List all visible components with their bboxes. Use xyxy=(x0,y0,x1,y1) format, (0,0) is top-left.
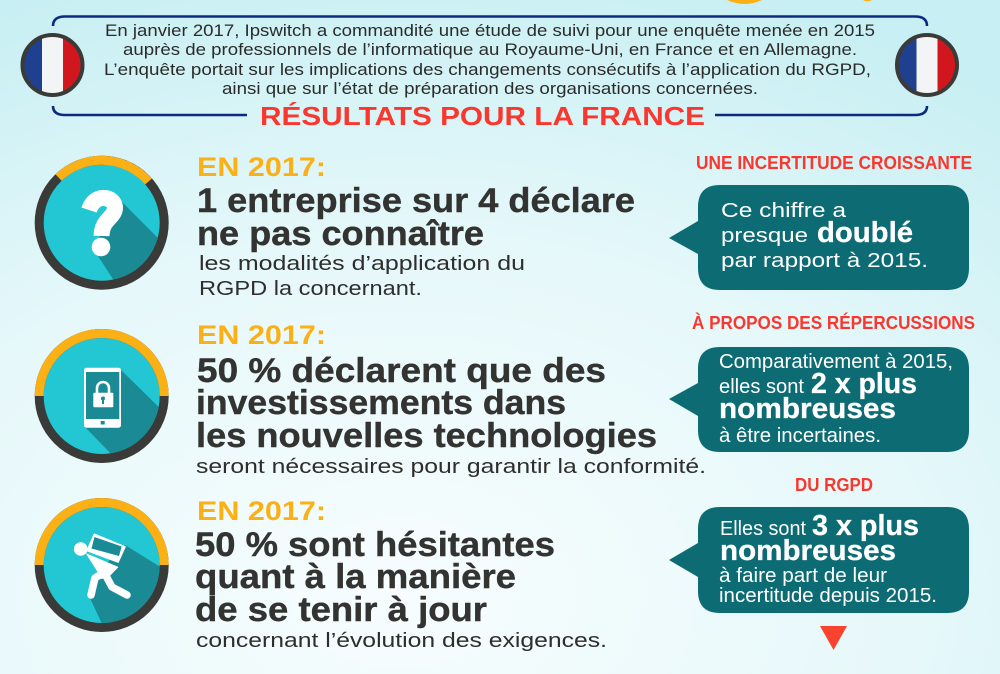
flag: France left xyxy=(22,35,83,95)
text block: year 3 xyxy=(195,496,607,652)
icon: question mark badge xyxy=(39,160,170,300)
callout: twice as many: 2 x plus xyxy=(811,368,917,400)
icon: person carrying laptop badge xyxy=(39,502,170,640)
label: of the GDPR: DU RGPD xyxy=(795,475,873,495)
arrow: continue down xyxy=(820,626,847,650)
flag: France right xyxy=(897,35,957,95)
callout: doubled: presque xyxy=(721,224,808,247)
callout: twice as many: Comparativement à 2015, xyxy=(719,350,953,373)
icon: phone with padlock badge xyxy=(39,334,170,470)
text block: year 2 xyxy=(196,320,706,478)
callout: three times as many: nombreuses xyxy=(720,535,896,567)
text block: year 2: les nouvelles technologies xyxy=(196,417,657,455)
callout: twice as many xyxy=(669,347,969,452)
intro text: ainsi que sur l’état de préparation des organisations concernées. xyxy=(222,80,758,98)
text block: year 3: 50 % sont hésitantes xyxy=(195,526,555,564)
callout: twice as many: nombreuses xyxy=(719,393,896,425)
text block: year 2: seront nécessaires pour garantir la conformité. xyxy=(196,456,706,478)
text block: year 1: ne pas connaître xyxy=(197,215,484,253)
intro frame xyxy=(53,16,927,115)
callout: doubled: par rapport à 2015. xyxy=(721,249,928,272)
heading: results for France: RÉSULTATS POUR LA FRANCE xyxy=(260,101,705,131)
callout: twice as many: elles sont xyxy=(719,375,804,398)
callout: three times as many: Elles sont xyxy=(720,517,806,540)
callout: three times as many: 3 x plus xyxy=(812,510,919,542)
text block: year 1 xyxy=(197,152,635,300)
text block: year 1: RGPD la concernant. xyxy=(199,278,422,300)
text block: year 3: quant à la manière xyxy=(195,558,516,596)
text block: year 3: EN 2017: xyxy=(197,496,326,526)
text block: year 3: de se tenir à jour xyxy=(195,591,487,629)
text block: year 2: EN 2017: xyxy=(197,320,326,350)
text block: year 1: EN 2017: xyxy=(197,152,326,182)
intro text: L’enquête portait sur les implications des changements consécutifs à l’application du RGPD, xyxy=(104,61,871,79)
callout: three times as many xyxy=(669,507,969,613)
label: about the repercussions: À PROPOS DES RÉPERCUSSIONS xyxy=(692,312,975,333)
intro text: auprès de professionnels de l’informatique au Royaume-Uni, en France et en Allemagne. xyxy=(123,41,857,59)
top cropped yellow fragments xyxy=(727,0,872,4)
intro text: En janvier 2017, Ipswitch a commandité une étude de suivi pour une enquête menée en 2015 xyxy=(105,22,875,40)
callout: doubled: Ce chiffre a xyxy=(721,199,847,222)
label: growing uncertainty: UNE INCERTITUDE CROISSANTE xyxy=(696,153,972,173)
text block: year 3: concernant l’évolution des exigences. xyxy=(196,630,607,652)
callout: three times as many: incertitude depuis 2015. xyxy=(719,584,937,607)
callout: three times as many: à faire part de leur xyxy=(719,564,887,587)
callout: doubled xyxy=(669,185,969,290)
callout: twice as many: à être incertaines. xyxy=(719,424,881,447)
intro text xyxy=(104,22,875,98)
callout: doubled: doublé xyxy=(817,217,913,249)
text block: year 1: 1 entreprise sur 4 déclare xyxy=(197,182,635,220)
text block: year 2: 50 % déclarent que des xyxy=(197,352,606,390)
text block: year 1: les modalités d’application du xyxy=(199,253,525,275)
text block: year 2: investissements dans xyxy=(196,384,566,422)
